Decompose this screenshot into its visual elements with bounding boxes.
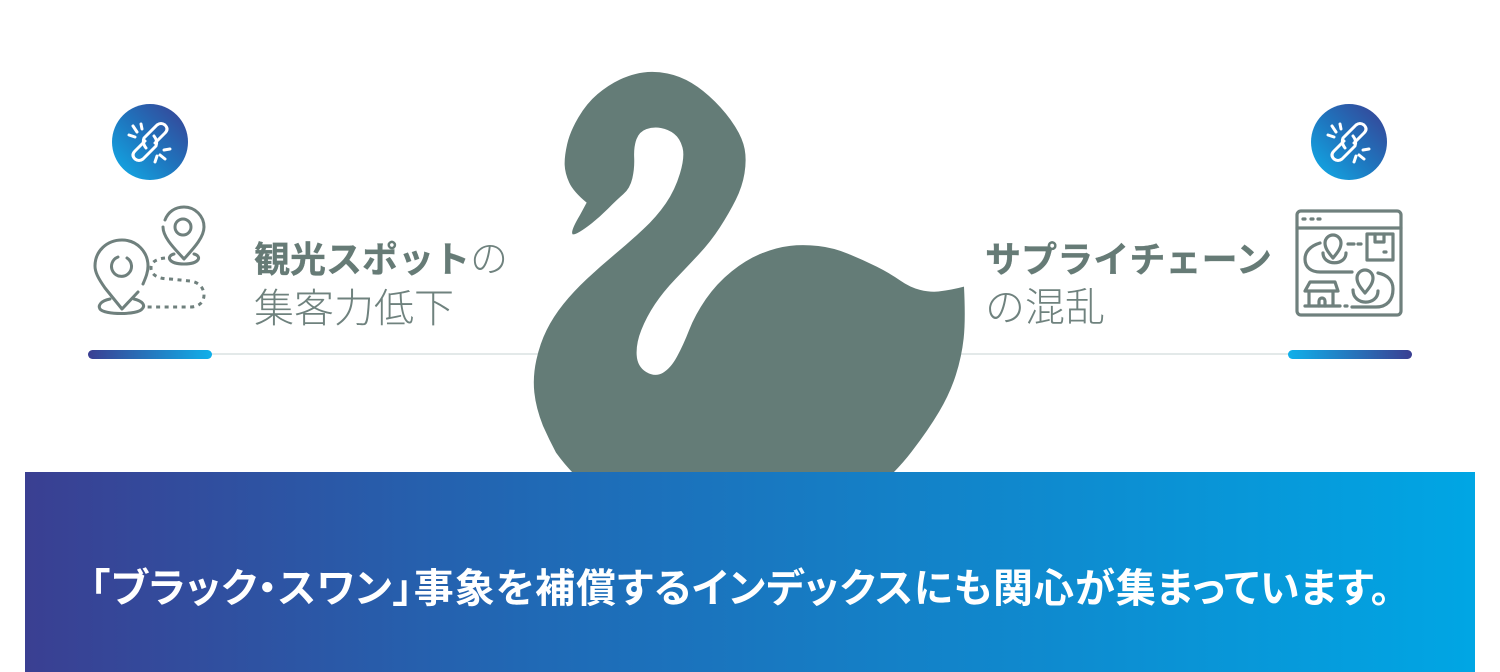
left label: tourist spots: [254, 239, 508, 331]
divider line right: [955, 353, 1295, 355]
right label: supply chain: [985, 239, 1272, 330]
bottom gradient band: [25, 472, 1475, 672]
swan silhouette: [534, 72, 965, 473]
accent bar right: [1288, 350, 1412, 359]
left label: tourist spots: 観光スポットの: [254, 239, 508, 281]
accent bar left: [88, 350, 212, 359]
bottom message: 「ブラック・スワン」事象を補償するインデックスにも関心が集まっています。: [90, 567, 1391, 611]
left label: tourist spots: 集客力低下: [254, 287, 454, 331]
left icon badge: broken link: [112, 104, 188, 180]
right icon badge: broken link: [1311, 104, 1387, 180]
right label: supply chain: サプライチェーン: [985, 239, 1272, 280]
icon: browser window with supply chain map: [1297, 211, 1401, 315]
icon: map pins with dashed route: [95, 207, 204, 314]
right label: supply chain: の混乱: [985, 286, 1105, 330]
divider line left: [205, 353, 545, 355]
